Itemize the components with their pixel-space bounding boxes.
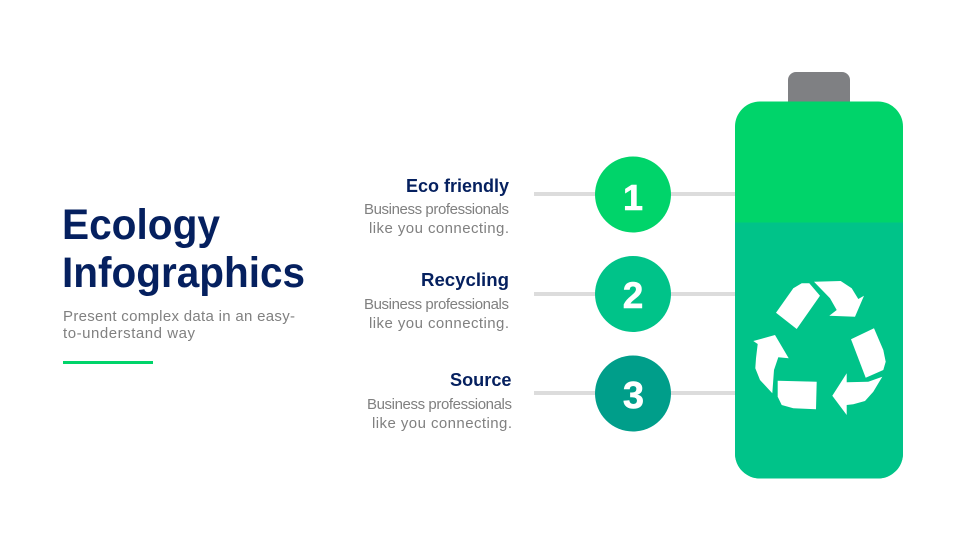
battery charge level — [735, 222, 903, 478]
subtitle: to-understand way — [63, 325, 196, 342]
item 3: Source: Source — [450, 370, 512, 390]
item 1: Eco friendly: Business professionals — [364, 201, 509, 218]
item 2: Recycling — [364, 270, 509, 332]
item 2: Recycling: Recycling — [421, 270, 509, 290]
title — [62, 201, 305, 297]
number badge 3 — [595, 356, 671, 432]
item 2: Recycling: Business professionals — [364, 296, 509, 313]
title: Ecology — [62, 201, 220, 249]
connector lines — [534, 192, 736, 395]
item 3: Source — [367, 370, 512, 432]
number badge 3: 3 — [623, 375, 644, 417]
item 1: Eco friendly: like you connecting. — [369, 220, 509, 237]
item 2: Recycling: like you connecting. — [369, 315, 509, 332]
battery cap — [788, 72, 850, 104]
item 3: Source: like you connecting. — [372, 415, 512, 432]
icon: battery — [735, 72, 903, 478]
subtitle: Present complex data in an easy- — [63, 308, 295, 325]
number badge 1 — [595, 156, 671, 232]
subtitle — [63, 308, 295, 342]
item 3: Source: Business professionals — [367, 396, 512, 413]
icon: recycling symbol — [753, 281, 886, 415]
number badge 2 — [595, 256, 671, 332]
title: Infographics — [62, 249, 305, 297]
item 1: Eco friendly — [364, 176, 509, 237]
number badge 1: 1 — [623, 177, 643, 218]
battery body — [735, 102, 903, 478]
number badge 2: 2 — [623, 275, 643, 316]
item 1: Eco friendly: Eco friendly — [406, 176, 509, 196]
title underline accent — [63, 361, 153, 364]
